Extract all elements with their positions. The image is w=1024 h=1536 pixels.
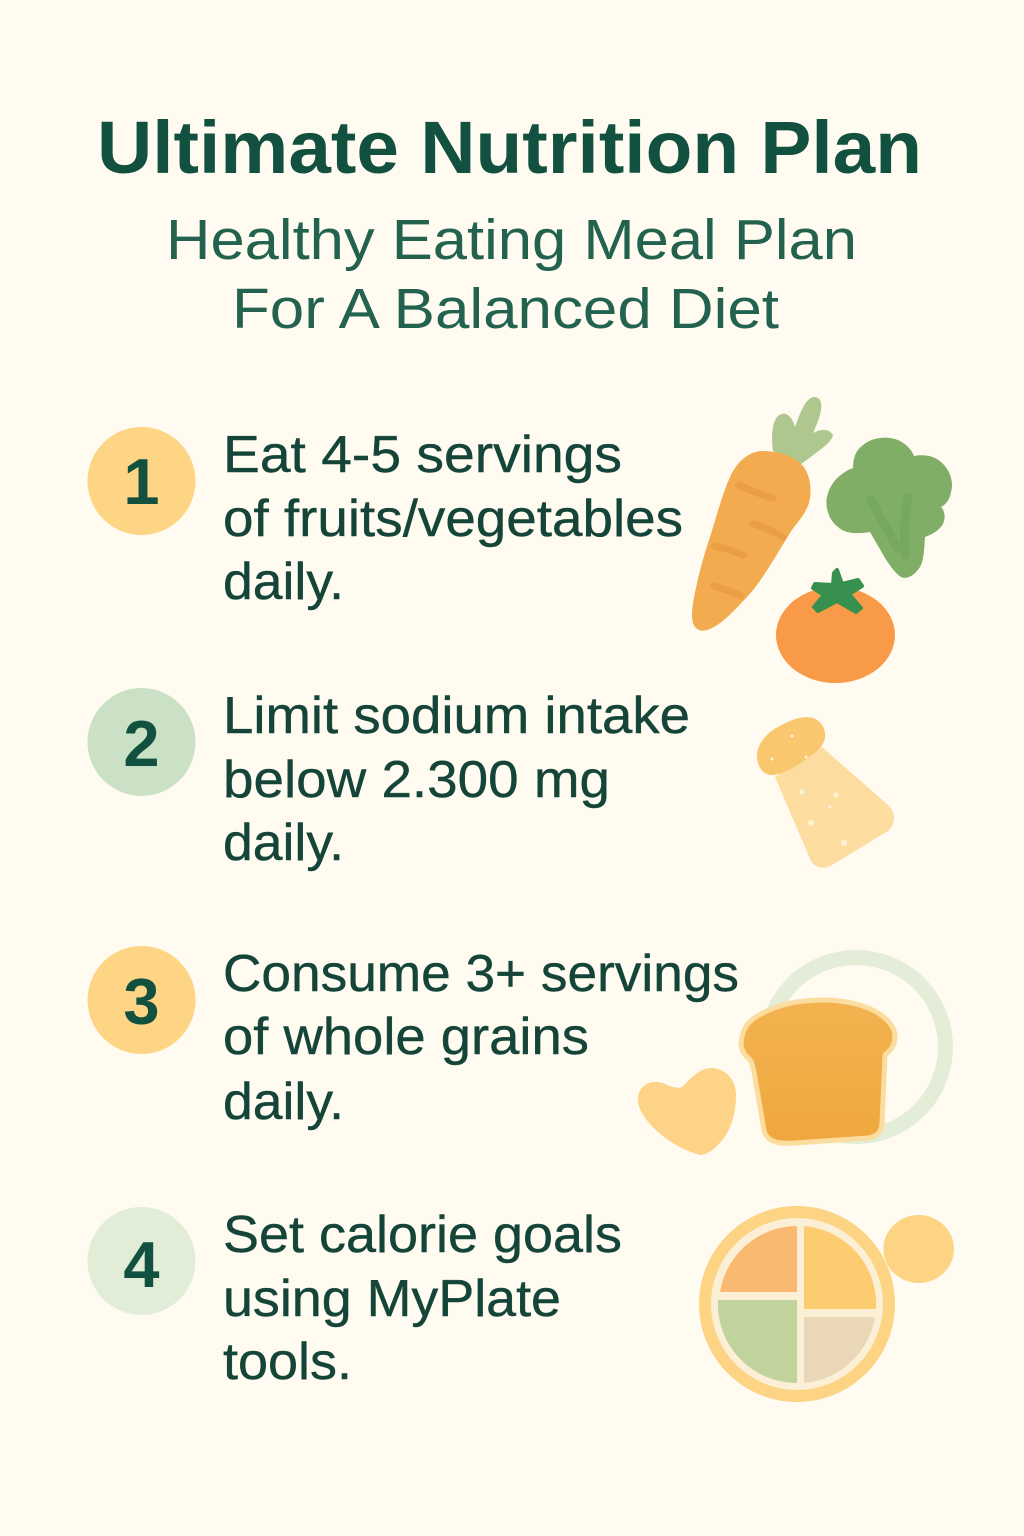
step 2 text <box>223 687 690 872</box>
step 4 <box>88 1206 954 1402</box>
subtitle: For A Balanced Diet <box>232 277 779 341</box>
step 1 text: daily. <box>223 553 344 611</box>
subtitle <box>166 208 857 341</box>
step 3 <box>88 945 946 1155</box>
number badge 2: 2 <box>123 707 160 780</box>
title: Ultimate Nutrition Plan <box>97 106 922 189</box>
number badge 4 <box>88 1207 196 1315</box>
side circle <box>883 1215 954 1283</box>
carrot leaves <box>772 397 833 465</box>
step 1 text: of fruits/vegetables <box>223 490 683 548</box>
step 1 text: Eat 4-5 servings <box>223 426 622 484</box>
step 2 text: below 2.300 mg <box>223 751 610 809</box>
step 3 text: of whole grains <box>223 1008 589 1066</box>
icon: MyPlate <box>699 1206 954 1402</box>
step 3 text: daily. <box>223 1073 344 1131</box>
broccoli <box>826 438 952 578</box>
bean <box>638 1068 736 1155</box>
tomato <box>776 587 895 683</box>
carrot body <box>692 451 811 631</box>
step 4 text: using MyPlate <box>223 1270 561 1328</box>
subtitle: Healthy Eating Meal Plan <box>166 208 857 272</box>
number badge 3 <box>88 946 196 1054</box>
step 4 text <box>223 1206 622 1391</box>
plate ring <box>766 958 946 1136</box>
bread <box>741 1000 895 1143</box>
plate rim <box>699 1206 895 1402</box>
step 2 text: Limit sodium intake <box>223 687 690 745</box>
step 3 text <box>223 945 739 1131</box>
step 2 text: daily. <box>223 814 344 872</box>
icon: bread on plate with bean <box>638 958 946 1155</box>
step 1 <box>88 397 952 683</box>
number badge 2 <box>88 688 196 796</box>
number badge 4: 4 <box>123 1228 160 1301</box>
icon: salt shaker <box>757 717 894 868</box>
number badge 1: 1 <box>123 445 160 518</box>
step 1 text <box>223 426 683 611</box>
step 2 <box>88 687 894 872</box>
number badge 3: 3 <box>123 965 160 1038</box>
number badge 1 <box>88 427 196 535</box>
step 3 text: Consume 3+ servings <box>223 945 739 1003</box>
plate sections <box>720 1226 797 1292</box>
icon: carrot, broccoli and tomato <box>692 397 952 683</box>
step 4 text: tools. <box>223 1333 352 1391</box>
step 4 text: Set calorie goals <box>223 1206 622 1264</box>
